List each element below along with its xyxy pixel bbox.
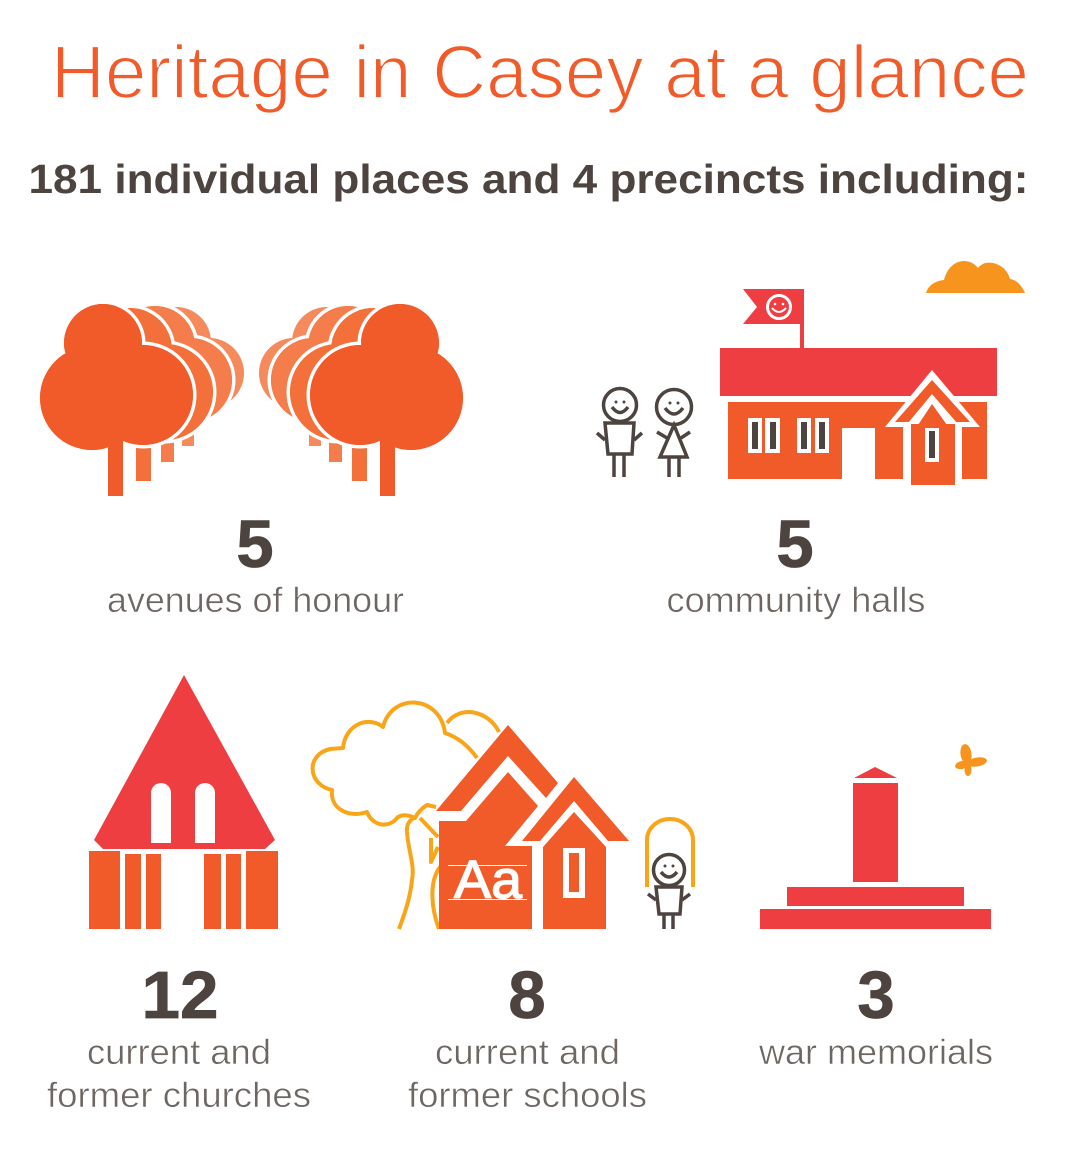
number: 5 halls: 5 — [776, 507, 814, 582]
icon: child skipping — [647, 819, 693, 929]
church walls — [89, 851, 278, 929]
number: 3: 3 — [857, 958, 895, 1033]
panel: war memorials — [758, 743, 993, 1072]
icon: church — [89, 675, 278, 929]
label: current and former schools: current and — [435, 1033, 620, 1072]
title: Heritage in Casey at a glance — [51, 30, 1029, 114]
subtitle: 181 individual places and 4 precincts including: — [28, 156, 1028, 202]
icon: cloud — [926, 261, 1025, 293]
school sign: Aa: Aa — [454, 850, 523, 910]
flag — [743, 289, 804, 349]
icon: butterfly — [954, 743, 988, 776]
porch — [885, 370, 980, 486]
icon: community hall — [720, 289, 997, 486]
label: avenues of honour: avenues of honour — [107, 581, 404, 620]
label: current and former churches: current and — [87, 1033, 271, 1072]
walls — [728, 402, 987, 479]
right row of trees — [259, 304, 463, 496]
icon: school building — [436, 725, 629, 929]
church roof — [94, 675, 275, 849]
panel: schools — [313, 703, 693, 1115]
label: war memorials: war memorials — [758, 1033, 993, 1072]
panel: churches — [47, 675, 311, 1115]
windows — [748, 418, 829, 453]
panel: community halls — [597, 261, 1025, 620]
number: 8: 8 — [508, 958, 546, 1033]
icon: avenues of trees — [40, 304, 463, 496]
label line 2: former churches — [47, 1076, 311, 1115]
label: community halls: community halls — [666, 581, 926, 620]
icon: memorial — [760, 767, 991, 929]
panel: avenues of honour — [40, 304, 463, 620]
label line 2: former schools — [408, 1076, 647, 1115]
icon: outlined tree — [313, 703, 499, 929]
number: 5 avenues: 5 — [236, 507, 274, 582]
number: 12: 12 — [142, 958, 218, 1033]
icon: two children — [597, 388, 692, 477]
left row of trees — [40, 304, 244, 496]
roof — [720, 348, 997, 396]
